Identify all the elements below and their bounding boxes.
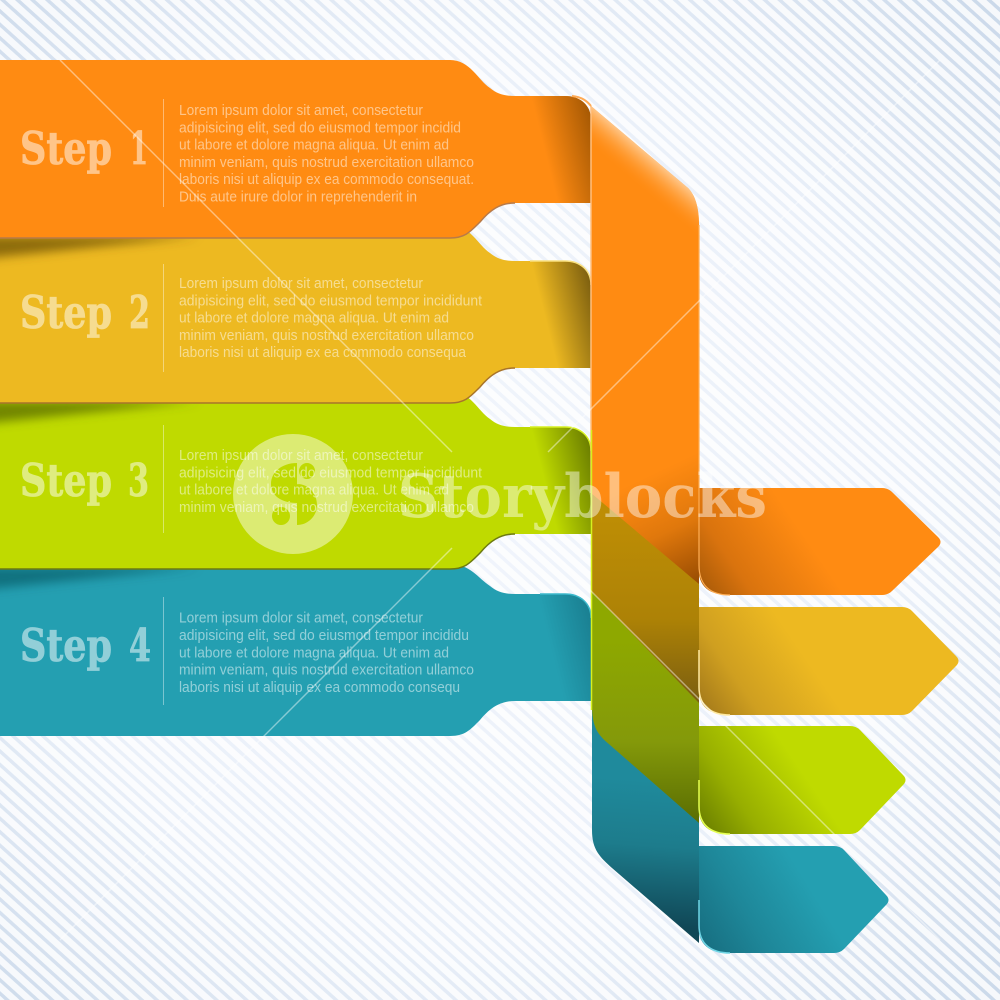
ribbon: lime left edge xyxy=(590,430,592,710)
ribbon: green fold xyxy=(592,590,730,834)
step 4 body text: laboris nisi ut aliquip ex ea commodo consequ xyxy=(179,679,460,696)
panel: step 4 teal band xyxy=(0,564,591,736)
step 1 body text: laboris nisi ut aliquip ex ea commodo consequat. xyxy=(179,171,474,188)
watermark: logo circle xyxy=(233,434,353,554)
step 2 divider xyxy=(163,264,164,372)
step 2 body text xyxy=(179,275,483,361)
step 2 body text: ut labore et dolore magna aliqua. Ut enim ad xyxy=(179,310,449,327)
step 2 body text: laboris nisi ut aliquip ex ea commodo consequa xyxy=(179,344,467,361)
step 2 body text: minim veniam, quis nostrud exercitation ullamco xyxy=(179,327,474,344)
watermark: cross lines xyxy=(60,60,940,940)
step 1 body text: ut labore et dolore magna aliqua. Ut enim ad xyxy=(179,137,449,154)
ribbon: orange fold xyxy=(572,96,730,595)
step 1 label: Step xyxy=(20,122,112,175)
arrow: orange xyxy=(695,488,940,595)
step 4 body text: adipisicing elit, sed do eiusmod tempor incididu xyxy=(179,627,469,644)
arrow: teal xyxy=(695,846,888,953)
step 4 divider xyxy=(163,597,164,705)
ribbon: yellow fold xyxy=(592,490,730,715)
step 3 label: Step xyxy=(20,454,112,507)
step 2 label: Step xyxy=(20,286,112,339)
panel: step 3 green band xyxy=(0,391,591,569)
step 1 body text: Duis aute irure dolor in reprehenderit in xyxy=(179,188,417,206)
step 1 body text: adipisicing elit, sed do eiusmod tempor incidid xyxy=(179,119,461,136)
step 2 label: 2 xyxy=(129,286,150,339)
step 4 label: 4 xyxy=(129,619,151,672)
step 3 body text: Lorem ipsum dolor sit amet, consectetur xyxy=(179,447,423,464)
arrow: green xyxy=(695,726,906,834)
panel: step 1 orange band xyxy=(0,60,591,238)
step 1 body text: Lorem ipsum dolor sit amet, consectetur xyxy=(179,102,423,119)
step 4 body text: ut labore et dolore magna aliqua. Ut enim ad xyxy=(179,644,449,661)
step 1 body text: minim veniam, quis nostrud exercitation ullamco xyxy=(179,154,474,171)
step 4 label: Step xyxy=(20,619,112,672)
step 1 body text xyxy=(179,102,474,206)
step 1 label: 1 xyxy=(130,122,148,175)
step 4 body text: minim veniam, quis nostrud exercitation ullamco xyxy=(179,662,474,679)
step 4 body text: Lorem ipsum dolor sit amet, consectetur xyxy=(179,610,423,627)
step 4 body text xyxy=(179,610,474,696)
panel: step 2 yellow band xyxy=(0,225,591,403)
step 1 divider xyxy=(163,99,164,207)
ribbon: teal fold xyxy=(592,700,730,953)
watermark: wordmark: Storyblocks xyxy=(398,462,767,532)
step 2 body text: Lorem ipsum dolor sit amet, consectetur xyxy=(179,275,423,292)
step 3 body text xyxy=(179,447,483,516)
step 3 divider xyxy=(163,425,164,533)
step 3 body text: adipisicing elit, sed do eiusmod tempor incididunt xyxy=(179,464,483,481)
step 3 label: 3 xyxy=(128,454,149,507)
step 3 body text: ut labore et dolore magna aliqua. Ut enim ad xyxy=(179,482,449,499)
step 2 body text: adipisicing elit, sed do eiusmod tempor incididunt xyxy=(179,292,483,309)
step 3 body text: minim veniam, quis nostrud exercitation ullamco xyxy=(179,499,474,516)
arrow: yellow xyxy=(695,607,958,715)
